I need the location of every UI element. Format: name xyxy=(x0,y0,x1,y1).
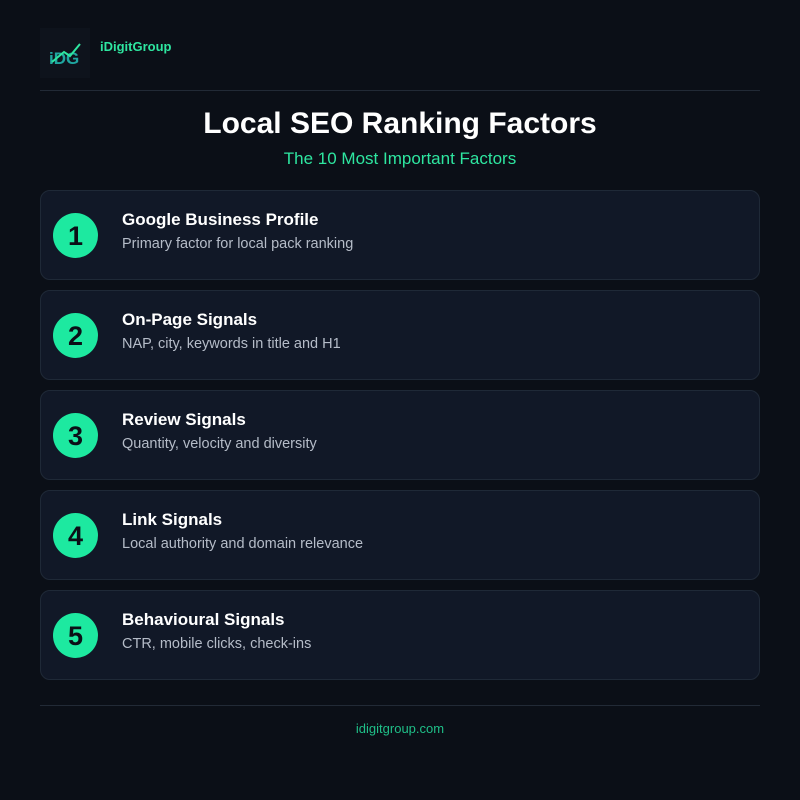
card 1: Google Business Profile xyxy=(122,210,318,229)
card 5: CTR, mobile clicks, check-ins xyxy=(122,636,311,652)
card 3: Review Signals xyxy=(122,410,246,429)
card 3 xyxy=(40,390,760,480)
card 4 xyxy=(40,490,760,580)
logo xyxy=(40,28,90,78)
card 2: 2 xyxy=(68,321,83,351)
card 4: 4 xyxy=(68,521,83,551)
footer: idigitgroup.com xyxy=(356,721,444,736)
brand name: iDigitGroup xyxy=(100,39,172,54)
card 2 xyxy=(40,290,760,380)
card 1 xyxy=(40,190,760,280)
card 4: Link Signals xyxy=(122,510,222,529)
card 1: Primary factor for local pack ranking xyxy=(122,236,353,252)
card 5 xyxy=(40,590,760,680)
card 5: 5 xyxy=(68,621,83,651)
title: Local SEO Ranking Factors xyxy=(203,107,597,140)
card 3: 3 xyxy=(68,421,83,451)
card 2: NAP, city, keywords in title and H1 xyxy=(122,336,341,352)
logo: iDG xyxy=(49,49,79,68)
card 1: 1 xyxy=(68,221,83,251)
card 3: Quantity, velocity and diversity xyxy=(122,436,317,452)
card 2: On-Page Signals xyxy=(122,310,257,329)
subtitle: The 10 Most Important Factors xyxy=(284,149,516,168)
card 4: Local authority and domain relevance xyxy=(122,536,363,552)
card 5: Behavioural Signals xyxy=(122,610,284,629)
